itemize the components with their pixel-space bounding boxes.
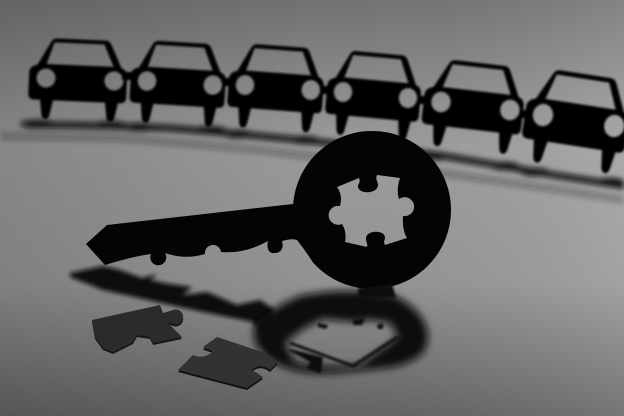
key head shadow ring <box>254 291 428 373</box>
row of six paper cars <box>27 37 624 176</box>
car 6 <box>518 66 624 176</box>
puzzle piece in shadow, lit centre <box>290 318 398 372</box>
key foot contact shadow <box>358 284 396 298</box>
key shaft shadow <box>70 266 275 345</box>
car 4 <box>323 49 424 142</box>
car 3 <box>225 42 326 133</box>
loose puzzle piece left <box>92 305 183 354</box>
key silhouette with puzzle-shaped hole <box>86 131 451 289</box>
car 1 <box>27 37 129 122</box>
car 2 <box>128 39 228 128</box>
car shadows on surface <box>0 120 624 200</box>
links between cars <box>122 76 532 114</box>
car 5 <box>419 57 528 155</box>
loose puzzle piece right <box>178 337 278 390</box>
